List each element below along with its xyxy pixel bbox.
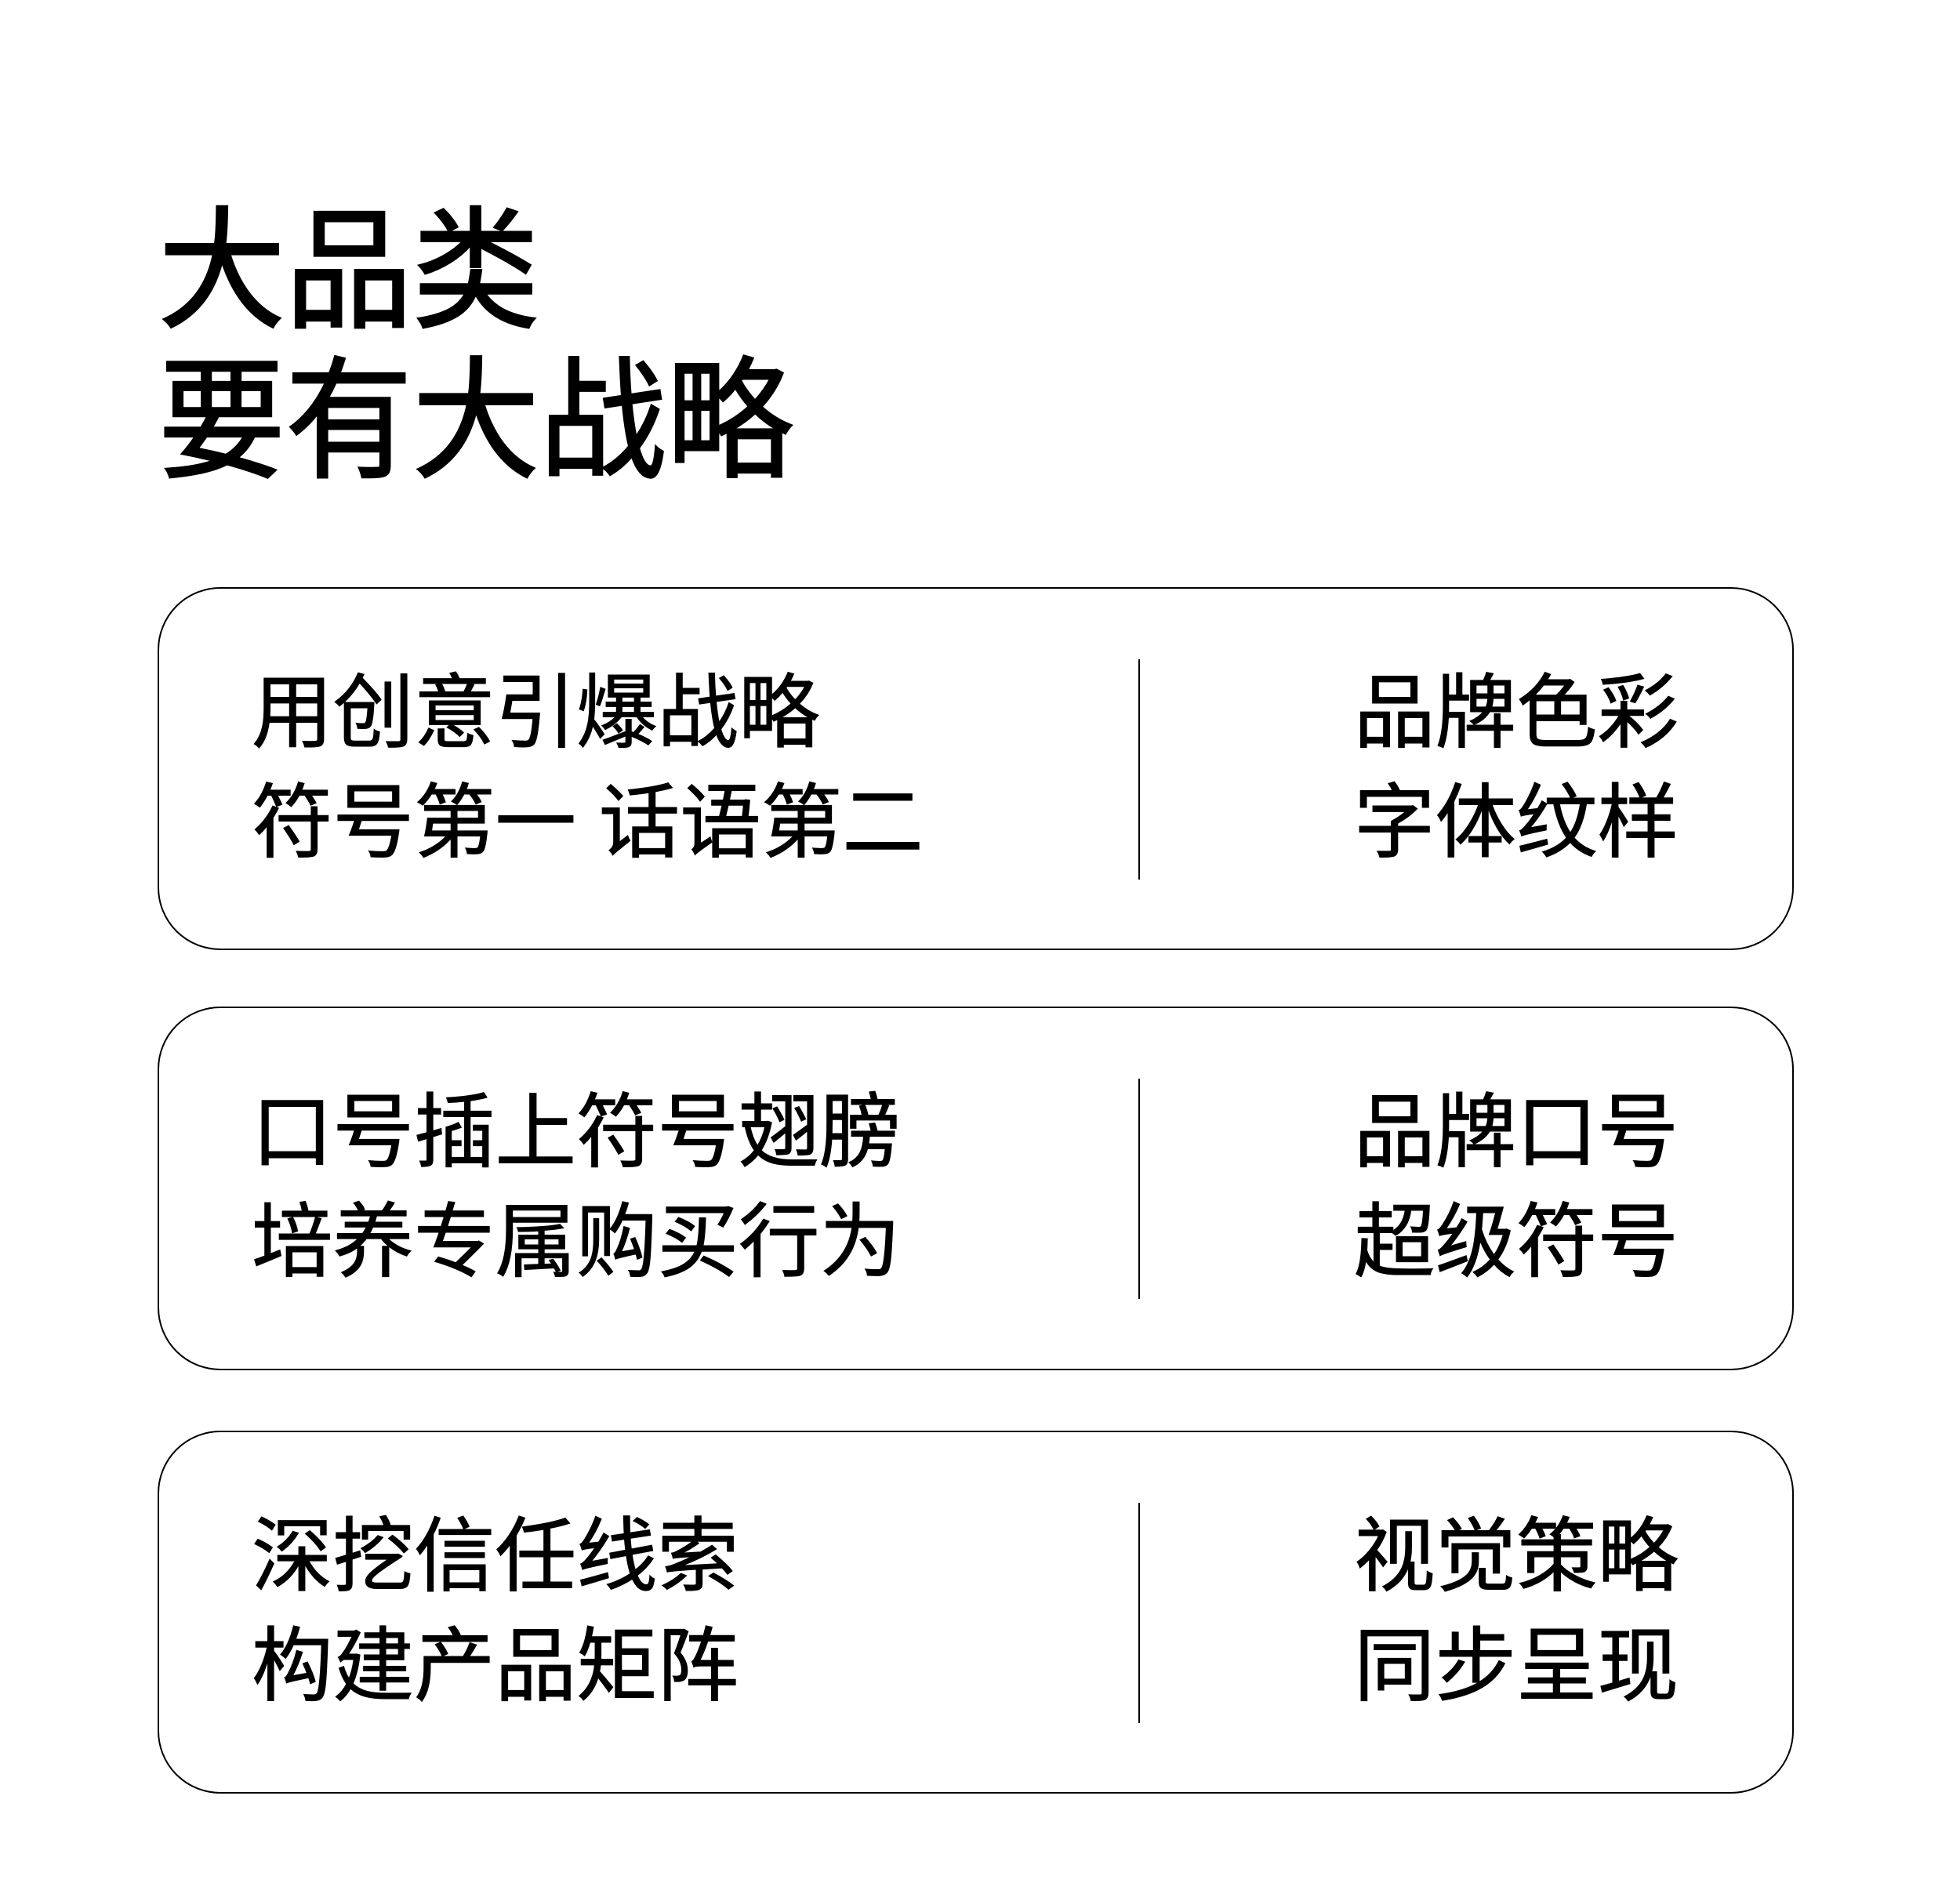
text: visual strategy presented together: 视觉策略	[1354, 1511, 1679, 1602]
title: 要有大战略	[158, 348, 793, 495]
text: brand slogan, super symbol: 超级符号	[1354, 1196, 1679, 1287]
text: visual strategy presented together: 同步呈现	[1354, 1620, 1679, 1711]
panel: brand colour and typography	[158, 587, 1794, 950]
text: trust clues and product matrix: 构建产品矩阵	[252, 1620, 739, 1711]
text: slogan with symbol wings: 口号插上符号翅膀	[252, 1087, 901, 1177]
text: trust clues and product matrix: 深挖信任线索	[252, 1511, 739, 1602]
panel: slogan and super symbol	[158, 1007, 1794, 1370]
divider	[1138, 1503, 1140, 1723]
text: brand slogan, super symbol: 品牌口号	[1354, 1087, 1679, 1177]
text: creative strategy	[252, 667, 924, 867]
text: brand colour, type and pattern	[1354, 667, 1679, 867]
text: brand slogan, super symbol	[1354, 1087, 1679, 1287]
text: slogan with symbol wings: 培养专属购买行为	[252, 1196, 901, 1287]
text: trust clues and product matrix	[252, 1511, 739, 1711]
text: brand colour, type and pattern: 品牌色彩	[1354, 667, 1679, 758]
divider	[1138, 659, 1140, 880]
title	[158, 198, 793, 495]
panel: visual strategy	[158, 1431, 1794, 1794]
divider	[1138, 1079, 1140, 1299]
text: brand colour, type and pattern: 字体纹样	[1354, 776, 1679, 867]
text: creative strategy: 符号第一 话语第二	[252, 776, 924, 867]
text: slogan with symbol wings	[252, 1087, 901, 1287]
title: 大品类	[158, 198, 539, 346]
text: visual strategy presented together	[1354, 1511, 1679, 1711]
text: creative strategy: 用创意引爆战略	[252, 667, 820, 758]
